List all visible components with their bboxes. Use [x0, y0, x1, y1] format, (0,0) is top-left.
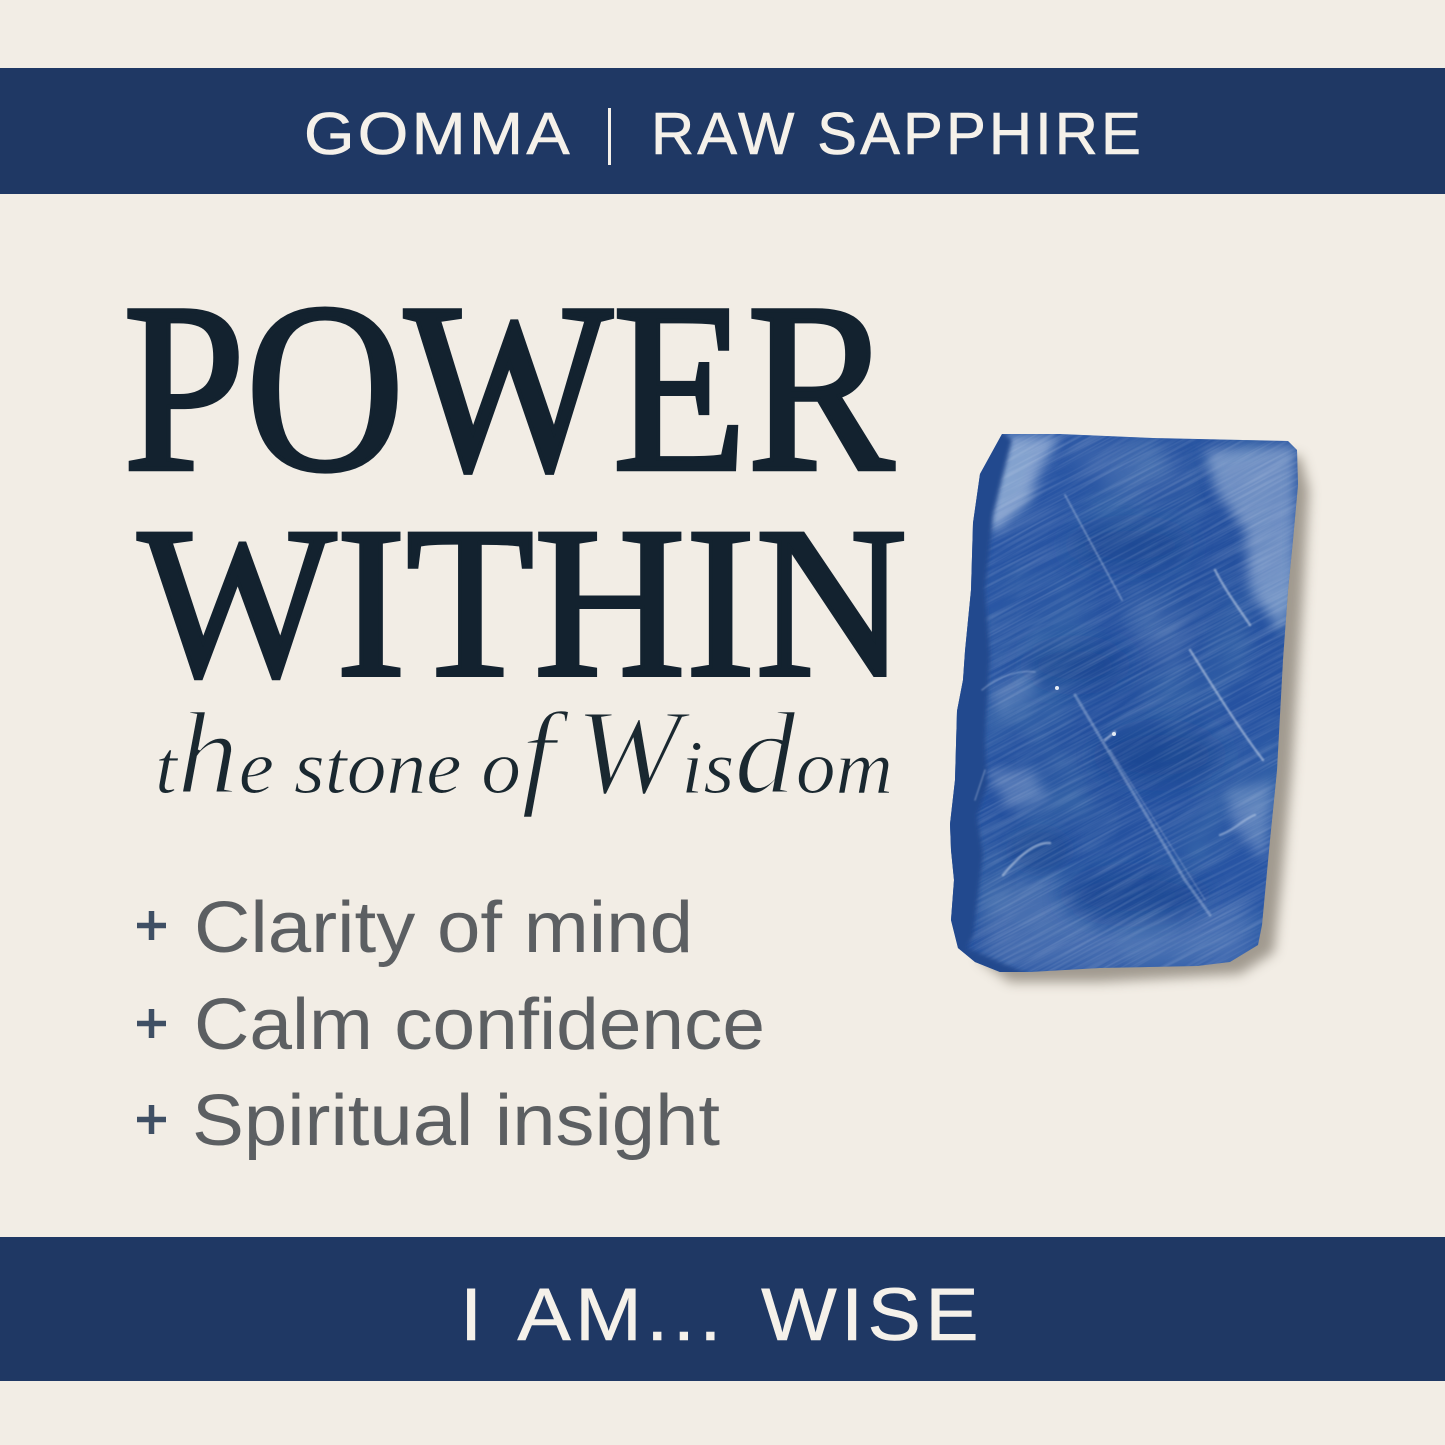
benefit: spiritual insight: Spiritual insight	[192, 1081, 720, 1161]
scratches	[975, 495, 1263, 915]
icon: raw sapphire stone	[950, 434, 1316, 990]
benefit: calm confidence: Calm confidence	[194, 985, 765, 1065]
title	[123, 254, 907, 722]
top banner	[0, 68, 1445, 194]
banner label right: RAW SAPPHIRE	[651, 101, 1144, 167]
fine hatching	[970, 434, 1298, 972]
benefit: clarity of mind: Clarity of mind	[194, 888, 693, 968]
pale patches	[985, 436, 1296, 970]
dark patches	[1010, 523, 1220, 919]
affirmation: I AM... WISE	[460, 1273, 983, 1356]
stone shadow	[980, 450, 1309, 982]
banner label left: GOMMA	[304, 101, 573, 167]
left dark facet	[950, 434, 1024, 972]
stone body	[950, 434, 1298, 972]
tiny flecks	[1055, 686, 1059, 690]
bottom banner	[0, 1237, 1445, 1381]
benefits list	[137, 888, 765, 1161]
script subtitle: the stone of Wisdom	[155, 685, 893, 820]
title line 1: POWER	[123, 254, 895, 522]
title line 2: WITHIN	[138, 483, 907, 722]
banner divider	[608, 108, 611, 165]
